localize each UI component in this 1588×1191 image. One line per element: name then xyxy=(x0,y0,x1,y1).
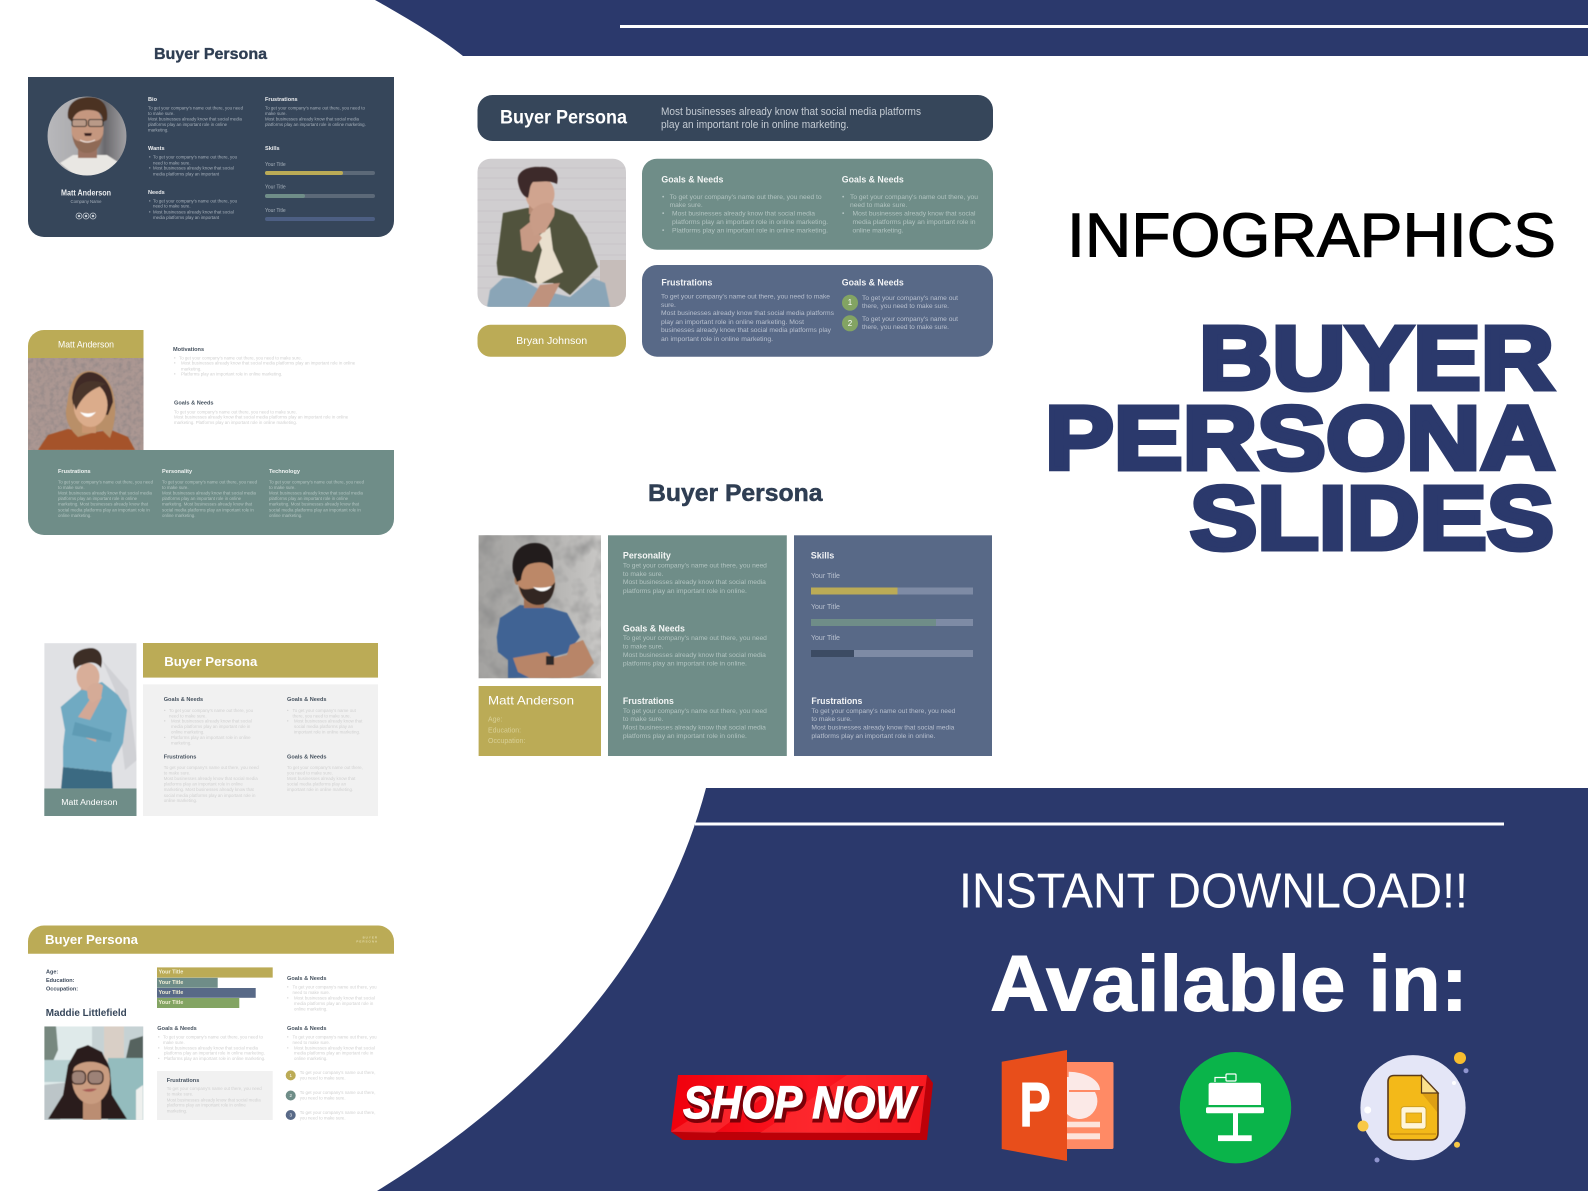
slide 5 grey content panel: Frustrations xyxy=(164,754,196,760)
band column: personality: Personality xyxy=(162,469,193,475)
skill bars xyxy=(811,588,973,657)
band column: personality: marketing. Most businesses already know that xyxy=(162,502,253,506)
blue skills column: Your Title xyxy=(811,604,840,611)
teal column: Most businesses already know that social media xyxy=(623,579,766,586)
bio: Most businesses already know that social media xyxy=(148,116,243,122)
teal column xyxy=(608,535,787,756)
slide 5 grey content panel: Most businesses already know that social xyxy=(171,719,252,724)
icon: Google Slides xyxy=(1358,1052,1468,1162)
gold name panel: Occupation: xyxy=(488,738,525,745)
numbered list: To get your company's name out there, xyxy=(300,1090,375,1095)
band column: personality: platforms play an important role in online xyxy=(162,496,242,501)
blue frustrations panel: To get your company's name out xyxy=(862,295,958,302)
band column: technology: social media platforms play an important role in xyxy=(269,508,361,512)
band column: frustrations: to make sure. xyxy=(58,485,85,490)
right goals block top xyxy=(287,976,377,1012)
numbered list: 1 xyxy=(289,1073,292,1078)
slide 2: teal persona card xyxy=(28,330,394,535)
teal goals panel: To get your company's name out there, you xyxy=(850,194,978,201)
slide 4: three-column persona xyxy=(478,480,992,756)
bio: marketing. xyxy=(148,128,168,132)
blue frustrations panel: To get your company's name out xyxy=(862,316,958,323)
teal goals panel xyxy=(642,159,993,250)
wants: media platforms play an important xyxy=(153,172,220,176)
slide 5 grey content panel: Goals & Needs xyxy=(164,697,203,703)
teal column: Frustrations xyxy=(623,696,674,706)
blue frustrations panel: there, you need to make sure. xyxy=(862,303,949,310)
name pill xyxy=(478,325,626,357)
band column: personality xyxy=(162,469,258,518)
teal goals panel: Goals & Needs xyxy=(842,175,904,185)
blue skills column: Frustrations xyxy=(811,696,862,706)
band column: frustrations: online marketing. xyxy=(58,513,91,518)
icon: PowerPoint xyxy=(1002,1050,1114,1161)
demographics: Occupation: xyxy=(46,987,78,993)
shop now badge: SHOP NOW xyxy=(685,1079,920,1130)
available in heading: Available in: xyxy=(990,938,1468,1028)
frustrations: platforms play an important role in online marketing. xyxy=(265,122,366,127)
slide 5 gold header xyxy=(143,643,378,678)
middle goals block: • xyxy=(158,1034,160,1040)
band column: frustrations: platforms play an important role in online xyxy=(58,496,138,501)
slide 5 name bar: Matt Anderson xyxy=(61,798,117,807)
teal column: Goals & Needs xyxy=(623,623,685,633)
blue frustrations panel: To get your company's name out there, you need to make xyxy=(661,294,830,300)
middle goals block: • xyxy=(158,1046,160,1050)
slide 5 grey content panel: online marketing. xyxy=(164,798,197,803)
skills bars: Your Title xyxy=(265,184,286,190)
needs: • xyxy=(149,210,151,214)
motivations: Most businesses already know that social media platforms play an important role in online xyxy=(181,360,356,366)
slide 5 grey content panel: To get your company's name out xyxy=(292,708,357,713)
skills bars: Skills xyxy=(265,146,280,152)
right goals block bottom xyxy=(287,1026,377,1061)
middle goals block: make sure. xyxy=(163,1040,185,1045)
skills bars: Your Title xyxy=(265,208,286,214)
portrait: woman with glasses xyxy=(44,1026,144,1121)
blue frustrations panel: Goals & Needs xyxy=(842,277,904,287)
teal goals panel: need to make sure. xyxy=(850,202,907,209)
slide 5 grey content panel: Most businesses already know that xyxy=(294,719,363,724)
gold name header xyxy=(28,330,144,358)
band column: technology: online marketing. xyxy=(269,513,302,518)
teal column: Most businesses already know that social media xyxy=(623,652,766,659)
teal goals panel: • xyxy=(842,194,845,201)
teal column: platforms play an important role in online. xyxy=(623,733,747,740)
numbered list: To get your company's name out there, xyxy=(300,1070,375,1075)
slide 5 grey content panel xyxy=(143,684,378,816)
frustrations xyxy=(265,97,366,127)
slide 5 grey content panel: • xyxy=(164,735,166,740)
band column: frustrations: marketing. Most businesses already know that xyxy=(58,502,149,506)
slide 5 grey content panel: need to make sure. xyxy=(169,714,207,718)
wants xyxy=(148,146,238,176)
INFOGRAPHICS heading: INFOGRAPHICS xyxy=(1067,202,1556,270)
grey frustrations box: platforms play an important role in online xyxy=(167,1102,246,1108)
teal band xyxy=(28,450,394,535)
blue frustrations panel: businesses already know that social media platforms play xyxy=(661,327,832,334)
slide 5 grey content panel: social media platforms play an xyxy=(287,782,347,787)
icon: PowerPoint: P xyxy=(1020,1071,1051,1140)
wants: Most businesses already know that social xyxy=(153,166,234,170)
demographics: Education: xyxy=(46,978,75,984)
band column: frustrations: Frustrations xyxy=(58,469,91,475)
teal goals panel: Platforms play an important role in online marketing. xyxy=(672,228,828,234)
band column: technology: Technology xyxy=(269,469,301,475)
header bar xyxy=(478,95,993,141)
slide 5 grey content panel: To get your company's name out there, xyxy=(287,765,363,770)
portrait: man in olive jacket xyxy=(477,158,627,308)
SLIDES: SLIDES xyxy=(1190,469,1554,569)
frustrations: make sure. xyxy=(265,111,287,116)
slide 5 grey content panel: Platforms play an important role in online xyxy=(171,735,251,740)
goals and needs: Most businesses already know that social media platforms play an important role in online xyxy=(174,414,349,420)
teal goals panel: platforms play an important role in online marketing. xyxy=(672,219,828,226)
slide 5 grey content panel: • xyxy=(164,708,166,713)
middle goals block: Platforms play an important role in online marketing. xyxy=(164,1056,265,1061)
band column: personality: To get your company's name out there, you need xyxy=(162,480,258,484)
blue skills column: Your Title xyxy=(811,635,840,642)
slide 5 grey content panel: media platforms play an important role in xyxy=(171,724,251,729)
name: Matt Anderson xyxy=(61,188,111,198)
right goals block top: Most businesses already know that social xyxy=(294,996,375,1000)
needs: To get your company's name out there, you xyxy=(153,198,238,204)
slide 5 grey content panel: Goals & Needs xyxy=(287,697,326,703)
goals and needs xyxy=(174,401,349,425)
slide 5 grey content panel: platforms play an important role in online xyxy=(164,782,243,787)
middle goals block: • xyxy=(158,1056,160,1061)
slide 5 grey content panel: social media platforms play an important role in xyxy=(164,793,256,798)
demographics: Age: xyxy=(46,969,58,975)
blue skills column: platforms play an important role in online. xyxy=(811,733,936,740)
numbered list: you need to make sure. xyxy=(300,1096,346,1100)
teal column: To get your company's name out there, you need xyxy=(623,562,767,570)
demographics xyxy=(46,969,78,993)
gold name panel xyxy=(479,686,601,756)
needs: • xyxy=(149,198,151,204)
band column: personality: social media platforms play an important role in xyxy=(162,508,254,512)
slide 5 grey content panel: • xyxy=(287,719,289,724)
right goals block top: To get your company's name out there, you xyxy=(292,984,377,990)
slide 6 gold header: PERSONA xyxy=(356,940,378,944)
blue skills column: to make sure. xyxy=(811,716,852,723)
teal goals panel: Most businesses already know that social xyxy=(852,210,976,218)
motivations: • xyxy=(174,356,176,360)
motivations: • xyxy=(174,372,176,376)
frustrations: To get your company's name out there, you need to xyxy=(265,106,365,110)
grey frustrations box: To get your company's name out there, you need xyxy=(167,1086,262,1091)
band column: technology xyxy=(269,469,365,518)
frustrations: Frustrations xyxy=(265,97,298,103)
header description: Most businesses already know that social media platforms xyxy=(661,106,921,118)
gold name panel: Age: xyxy=(488,716,502,724)
right goals block top: Goals & Needs xyxy=(287,976,326,982)
slide 5 grey content panel: To get your company's name out there, you xyxy=(169,708,254,713)
slide 5: denim persona xyxy=(44,643,378,816)
goals and needs: Goals & Needs xyxy=(174,401,213,407)
header title: Buyer Persona xyxy=(500,108,627,128)
teal goals panel: online marketing. xyxy=(852,228,904,234)
teal column: to make sure. xyxy=(623,571,664,578)
slide 6: Maddie Littlefield xyxy=(28,926,394,1121)
wants: need to make sure. xyxy=(153,160,191,166)
wants: • xyxy=(149,154,151,160)
teal column: platforms play an important role in online. xyxy=(623,588,747,595)
header description xyxy=(661,106,921,131)
slide 5 grey content panel: important role in online marketing. xyxy=(287,787,353,792)
portrait: man with glasses xyxy=(47,96,127,177)
wants: To get your company's name out there, you xyxy=(153,154,238,160)
right goals block bottom: • xyxy=(287,1034,289,1040)
right goals block top: need to make sure. xyxy=(292,990,330,995)
shop now badge: SHOP NOW xyxy=(683,1077,918,1128)
slide 1: dark persona card xyxy=(28,46,394,237)
bio: Bio xyxy=(148,97,158,103)
band column: frustrations xyxy=(58,469,154,518)
blue skills column: Your Title xyxy=(811,573,840,580)
band column: personality: online marketing. xyxy=(162,513,195,518)
slide 1 heading: Buyer Persona xyxy=(154,46,267,63)
goals and needs: To get your company's name out there, you need to make sure. xyxy=(174,410,297,414)
bottom navy panel xyxy=(377,788,1588,1191)
slide 5 grey content panel: marketing. xyxy=(171,740,192,746)
teal column: Personality xyxy=(623,551,671,561)
blue frustrations panel: Frustrations xyxy=(661,277,712,287)
band column: technology: to make sure. xyxy=(269,485,296,490)
bio: to make sure. xyxy=(148,111,175,116)
teal goals panel: • xyxy=(842,210,845,218)
slide 4 heading: Buyer Persona xyxy=(648,480,823,507)
blue frustrations panel xyxy=(642,265,993,357)
middle goals block xyxy=(157,1026,265,1061)
blue frustrations panel: Most businesses already know that social media platforms xyxy=(661,310,835,317)
numbered list: 2 xyxy=(289,1093,292,1098)
band column: personality: to make sure. xyxy=(162,485,189,490)
slide 5 name bar xyxy=(44,788,136,816)
right goals block bottom: • xyxy=(287,1046,289,1050)
grey frustrations box: Frustrations xyxy=(167,1078,199,1084)
band column: technology: marketing. Most businesses already know that xyxy=(269,502,360,506)
grey frustrations box xyxy=(157,1071,273,1120)
icon: Keynote xyxy=(1180,1052,1291,1163)
slide 5 grey content panel: important role in online marketing. xyxy=(294,730,360,734)
numbered list: you need to make sure. xyxy=(300,1076,346,1080)
company: Company Name xyxy=(70,199,102,204)
teal goals panel: • xyxy=(662,228,665,234)
bio xyxy=(148,97,244,132)
main title block xyxy=(1045,202,1556,569)
motivations: marketing. xyxy=(181,366,202,372)
motivations: Platforms play an important role in online marketing. xyxy=(181,372,282,376)
gold name panel: Education: xyxy=(488,728,521,734)
right goals block bottom: Goals & Needs xyxy=(287,1026,326,1032)
horizontal bar chart: Your Title xyxy=(158,980,183,986)
right goals block top: • xyxy=(287,984,289,990)
needs: media platforms play an important xyxy=(153,215,220,220)
slide 5 grey content panel: social media platforms play an xyxy=(294,724,354,729)
teal column: platforms play an important role in online. xyxy=(623,660,747,668)
blue frustrations panel: 2 xyxy=(848,319,853,328)
slide 6 name: Maddie Littlefield xyxy=(46,1007,127,1019)
blue frustrations panel: 1 xyxy=(848,298,853,307)
slide 5 grey content panel: To get your company's name out there, you need xyxy=(164,765,259,770)
name pill: Bryan Johnson xyxy=(516,336,587,347)
bio: To get your company's name out there, you need xyxy=(148,106,244,110)
numbered list: you need to make sure. xyxy=(300,1116,346,1120)
right goals block bottom: Most businesses already know that social xyxy=(294,1046,375,1050)
teal goals panel: Most businesses already know that social media xyxy=(672,210,815,218)
right goals block top: • xyxy=(287,996,289,1000)
slide 2 name: Matt Anderson xyxy=(58,340,114,350)
motivations: To get your company's name out there, you need to make sure. xyxy=(179,356,302,360)
portrait: smiling woman xyxy=(28,358,144,450)
instant download text: INSTANT DOWNLOAD!! xyxy=(959,864,1468,918)
slide 5 grey content panel: online marketing. xyxy=(171,730,204,734)
horizontal bar chart: Your Title xyxy=(158,990,183,996)
slide 1 panel xyxy=(28,77,394,237)
BUYER: BUYER xyxy=(1199,309,1554,409)
needs: Needs xyxy=(148,190,165,196)
needs: Most businesses already know that social xyxy=(153,210,234,214)
slide 6 gold header xyxy=(28,926,394,954)
header description: play an important role in online marketing. xyxy=(661,119,849,131)
teal column: To get your company's name out there, you need xyxy=(623,635,767,642)
numbered list: To get your company's name out there, xyxy=(300,1110,375,1115)
right goals block bottom: To get your company's name out there, you xyxy=(292,1034,377,1040)
blue skills column: Skills xyxy=(811,551,834,561)
skills bars: Your Title xyxy=(265,162,286,168)
wants: • xyxy=(149,166,151,170)
slide 5 gold header: Buyer Persona xyxy=(164,654,258,669)
social icons xyxy=(76,213,96,219)
teal column: to make sure. xyxy=(623,716,664,723)
PERSONA: PERSONA xyxy=(1045,389,1555,489)
right goals block bottom: need to make sure. xyxy=(292,1040,330,1045)
blue skills column: To get your company's name out there, you need xyxy=(811,708,956,715)
middle goals block: Most businesses already know that social media xyxy=(164,1046,259,1050)
bio: platforms play an important role in online xyxy=(148,122,228,127)
teal goals panel: To get your company's name out there, you need to xyxy=(670,194,822,201)
slide 5 grey content panel: there, you need to make sure. xyxy=(292,714,351,718)
blue frustrations panel: sure. xyxy=(661,302,676,309)
grey frustrations box: Most businesses already know that social media xyxy=(167,1097,261,1102)
slide 5 grey content panel: • xyxy=(164,719,166,724)
slide 5 grey content panel: • xyxy=(287,708,289,713)
needs: need to make sure. xyxy=(153,204,191,208)
motivations: • xyxy=(174,360,176,366)
band column: frustrations: Most businesses already know that social media xyxy=(58,490,153,496)
horizontal bar chart: Your Title xyxy=(158,970,183,976)
slide 3: Bryan Johnson card xyxy=(477,95,993,357)
blue frustrations panel: play an important role in online marketing. Most xyxy=(661,319,804,326)
top navy banner xyxy=(375,0,1588,56)
skills bars xyxy=(265,146,375,221)
band column: frustrations: To get your company's name out there, you need xyxy=(58,480,154,484)
middle goals block: Goals & Needs xyxy=(157,1026,197,1032)
slide 5 grey content panel: Goals & Needs xyxy=(287,754,326,760)
teal goals panel: • xyxy=(662,194,665,201)
teal goals panel: Goals & Needs xyxy=(661,175,723,185)
slide 5 grey content panel: Most businesses already know that social media xyxy=(164,776,258,781)
blue frustrations panel: an important role in online marketing. xyxy=(661,336,773,343)
numbered list: 3 xyxy=(289,1112,292,1118)
blue frustrations panel: there, you need to make sure. xyxy=(862,324,949,331)
motivations: Motivations xyxy=(173,347,204,353)
teal goals panel: media platforms play an important role in xyxy=(852,219,976,226)
blue skills column xyxy=(794,535,992,756)
teal column: to make sure. xyxy=(623,644,664,650)
numbered list xyxy=(286,1070,375,1120)
slide 6 gold header: Buyer Persona xyxy=(45,933,139,947)
teal goals panel: make sure. xyxy=(670,202,703,209)
slide 5 grey content panel: to make sure. xyxy=(164,770,190,776)
middle goals block: platforms play an important role in online marketing. xyxy=(164,1050,265,1056)
band column: personality: Most businesses already know that social media xyxy=(162,490,257,496)
horizontal bar chart: Your Title xyxy=(158,1000,183,1006)
teal goals panel: • xyxy=(662,210,665,218)
portrait: man in blue t-shirt xyxy=(478,535,602,679)
teal column: Most businesses already know that social media xyxy=(623,724,766,732)
needs xyxy=(148,190,238,220)
teal column: To get your company's name out there, you need xyxy=(623,708,767,715)
blue skills column: Most businesses already know that social media xyxy=(811,724,955,732)
right goals block bottom: media platforms play an important role in xyxy=(294,1050,374,1056)
band column: technology: Most businesses already know that social media xyxy=(269,490,364,496)
gold name panel: Matt Anderson xyxy=(488,694,574,708)
motivations xyxy=(173,347,356,376)
slide 5 grey content panel: you need to make sure. xyxy=(287,770,333,776)
wants: Wants xyxy=(148,146,165,152)
slide 5 grey content panel: Most businesses already know that xyxy=(287,776,356,781)
band column: technology: platforms play an important role in online xyxy=(269,496,349,501)
slide 5 grey content panel: marketing. Most businesses already know that xyxy=(164,787,255,792)
right goals block bottom: online marketing. xyxy=(294,1056,327,1061)
goals and needs: marketing. Platforms play an important role in online marketing. xyxy=(174,420,297,425)
grey frustrations box: to make sure. xyxy=(167,1092,193,1096)
grey frustrations box: marketing. xyxy=(167,1108,187,1113)
band column: frustrations: social media platforms play an important role in xyxy=(58,508,150,512)
middle goals block: To get your company's name out there, you need to xyxy=(163,1034,263,1040)
slide 6 gold header: BUYER xyxy=(363,936,378,940)
horizontal bar chart xyxy=(157,967,273,1008)
band column: technology: To get your company's name out there, you need xyxy=(269,480,365,484)
right goals block top: online marketing. xyxy=(294,1006,327,1012)
frustrations: Most businesses already know that social media xyxy=(265,116,360,122)
portrait: man in denim jacket xyxy=(44,643,137,789)
right goals block top: media platforms play an important role in xyxy=(294,1001,374,1006)
